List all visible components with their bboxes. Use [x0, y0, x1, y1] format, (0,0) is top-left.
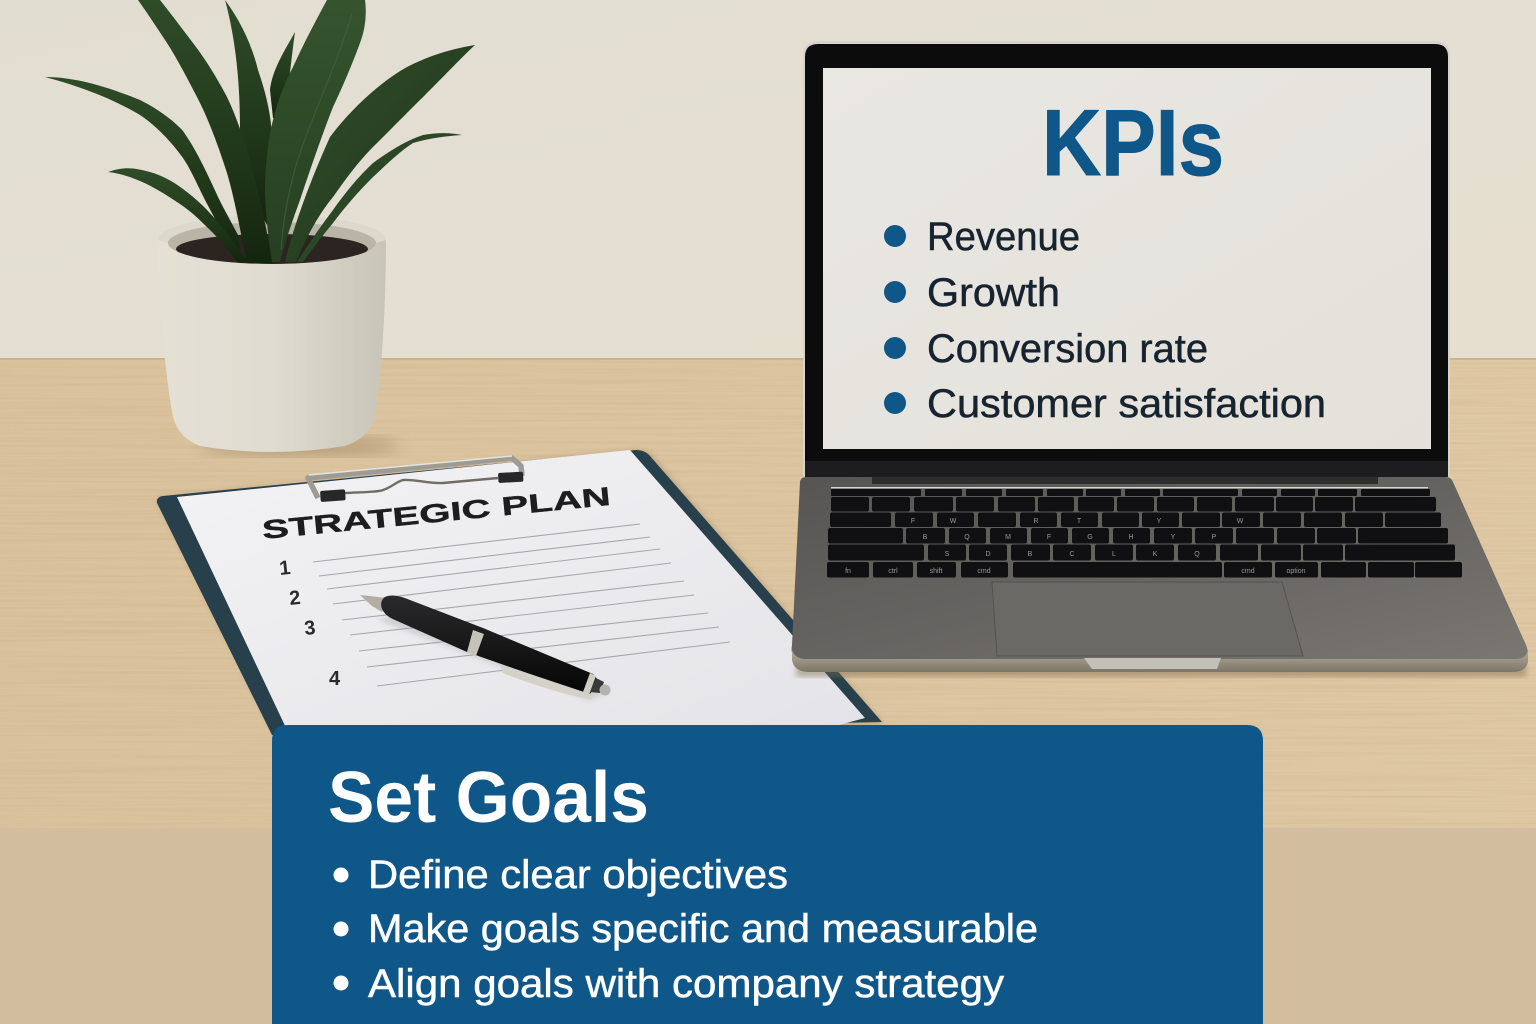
list numbers: 1 — [278, 557, 292, 580]
key legends: F — [911, 518, 915, 525]
ruled lines — [313, 524, 730, 686]
key legends: W — [1237, 518, 1244, 525]
list numbers — [278, 557, 341, 690]
hinge recess — [872, 477, 1378, 484]
goal list: Align goals with company strategy — [368, 962, 1004, 1006]
KPI list — [884, 215, 1326, 426]
key legends: C — [1069, 551, 1075, 558]
plant leaves — [45, 0, 475, 263]
key legends — [845, 518, 1306, 575]
metal clip — [308, 456, 523, 502]
key legends: H — [1128, 534, 1134, 541]
KPI list: Conversion rate — [927, 327, 1208, 371]
key legends: B — [1028, 551, 1033, 558]
potted plant — [45, 0, 475, 456]
lid opening notch — [1084, 658, 1221, 669]
clipboard board — [157, 450, 882, 735]
key legends: W — [950, 518, 957, 525]
list numbers: 2 — [288, 587, 302, 610]
key legends: Y — [1171, 534, 1176, 541]
laptop — [792, 41, 1528, 677]
key legends: ctrl — [888, 568, 898, 575]
key legends: Q — [964, 534, 970, 541]
KPI list: Growth — [927, 271, 1060, 315]
KPI list: Customer satisfaction — [927, 382, 1326, 426]
panel heading: Set Goals — [328, 758, 649, 838]
paper sheet — [177, 450, 865, 730]
key legends: G — [1087, 534, 1093, 541]
key legends: cmd — [977, 568, 991, 575]
laptop lid and bezel — [803, 41, 1450, 477]
panel: set goals — [272, 725, 1263, 1024]
pen — [360, 595, 610, 700]
key legends: D — [985, 551, 991, 558]
clipboard with strategic plan — [157, 450, 884, 735]
key legends: option — [1286, 568, 1306, 575]
key legends: M — [1005, 534, 1011, 541]
key legends: B — [923, 534, 928, 541]
key legends: T — [1077, 518, 1082, 525]
key legends: P — [1212, 534, 1217, 541]
key legends: L — [1112, 551, 1116, 558]
pot body — [158, 240, 386, 452]
key legends: cmd — [1241, 568, 1255, 575]
list numbers: 4 — [329, 668, 341, 690]
goal list — [334, 853, 1038, 1006]
laptop base — [792, 477, 1528, 660]
KPI list: Revenue — [927, 215, 1080, 259]
trackpad — [992, 582, 1303, 656]
key legends: Q — [1194, 551, 1200, 558]
goal list: Make goals specific and measurable — [368, 907, 1038, 951]
key legends: shift — [930, 568, 942, 575]
key legends: F — [1047, 534, 1051, 541]
lower beige band — [0, 828, 1536, 1024]
plan heading: STRATEGIC PLAN — [261, 481, 612, 545]
wooden desk — [0, 358, 1536, 828]
base front edge — [792, 650, 1528, 672]
key legends: S — [945, 551, 950, 558]
key legends: fn — [845, 568, 851, 575]
wall background — [0, 0, 1536, 358]
keyboard — [827, 489, 1462, 578]
laptop screen — [823, 68, 1431, 449]
key legends: R — [1033, 518, 1039, 525]
key legends: K — [1153, 551, 1158, 558]
goal list: Define clear objectives — [368, 853, 788, 897]
key legends: Y — [1157, 518, 1162, 525]
KPIs heading: KPIs — [1042, 90, 1224, 195]
list numbers: 3 — [303, 617, 317, 640]
